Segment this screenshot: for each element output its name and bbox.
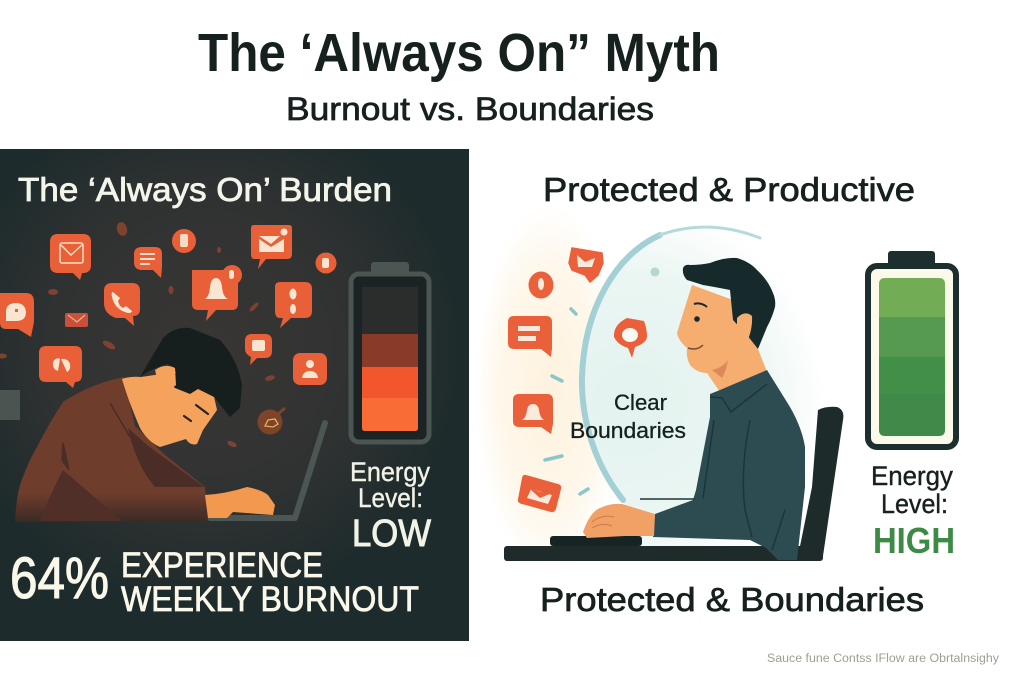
keyboard bbox=[550, 536, 642, 546]
neck shadow bbox=[712, 360, 728, 378]
shield dome bbox=[582, 227, 840, 560]
battery: high bbox=[868, 251, 956, 447]
panel heading: burden: The ‘Always On’ Burden bbox=[18, 171, 392, 208]
source note: Sauce fune Contss IFlow are Obrtalnsighy bbox=[767, 653, 999, 665]
shirt folds bbox=[640, 384, 785, 550]
lower body shadow bbox=[40, 470, 122, 521]
energy label: low: Energy bbox=[350, 457, 430, 487]
label: clear boundaries: Clear bbox=[614, 390, 667, 415]
background object: device edge bbox=[0, 390, 20, 420]
hair bbox=[140, 328, 242, 417]
stat caption bbox=[121, 546, 419, 619]
panel: always on burden bbox=[0, 149, 469, 641]
title: The ‘Always On” Myth bbox=[198, 23, 720, 83]
energy label: high: Level: bbox=[881, 489, 948, 519]
stat caption: WEEKLY BURNOUT bbox=[121, 580, 419, 619]
hand bbox=[583, 504, 655, 538]
stat caption: EXPERIENCE bbox=[121, 546, 323, 585]
hair bbox=[683, 258, 775, 349]
soft glow bbox=[475, 205, 625, 575]
energy label: high: Energy bbox=[871, 461, 953, 491]
arm shadow bbox=[128, 428, 204, 487]
panel: protected and productive bbox=[475, 171, 956, 618]
eye and smile bbox=[688, 303, 707, 349]
energy label: low: Level: bbox=[358, 483, 423, 513]
closed eye bbox=[184, 405, 208, 421]
stat: 64 percent: 64% bbox=[10, 546, 109, 611]
debris: small flecks bbox=[0, 221, 275, 448]
energy label: high bbox=[871, 461, 955, 561]
shirt fold bbox=[62, 403, 130, 470]
illustration: exhausted worker bbox=[15, 328, 325, 522]
energy label: high: HIGH bbox=[873, 520, 955, 561]
deflected dashes bbox=[545, 309, 588, 494]
energy label: low bbox=[350, 457, 431, 555]
notification icons: burden bbox=[0, 225, 336, 388]
notification icons: deflected bbox=[508, 248, 647, 512]
energy label: low: LOW bbox=[352, 513, 431, 555]
hand bbox=[205, 487, 275, 518]
label: clear boundaries: Boundaries bbox=[570, 418, 686, 443]
shirt bbox=[653, 370, 805, 560]
shirt bbox=[15, 377, 208, 522]
footer heading: protected and boundaries: Protected & Boundaries bbox=[540, 581, 924, 618]
icon: fading alert bbox=[258, 408, 285, 434]
face and neck bbox=[677, 285, 767, 395]
label: clear boundaries bbox=[570, 390, 686, 443]
face and neck bbox=[122, 372, 217, 447]
desk bbox=[504, 546, 823, 561]
ear bbox=[737, 313, 752, 347]
chair bbox=[797, 407, 843, 561]
battery: low bbox=[351, 262, 429, 442]
panel heading: protected: Protected & Productive bbox=[543, 171, 915, 208]
laptop bbox=[210, 423, 325, 518]
ear bbox=[155, 366, 176, 394]
subtitle: Burnout vs. Boundaries bbox=[286, 91, 654, 127]
illustration: focused worker bbox=[504, 258, 843, 561]
